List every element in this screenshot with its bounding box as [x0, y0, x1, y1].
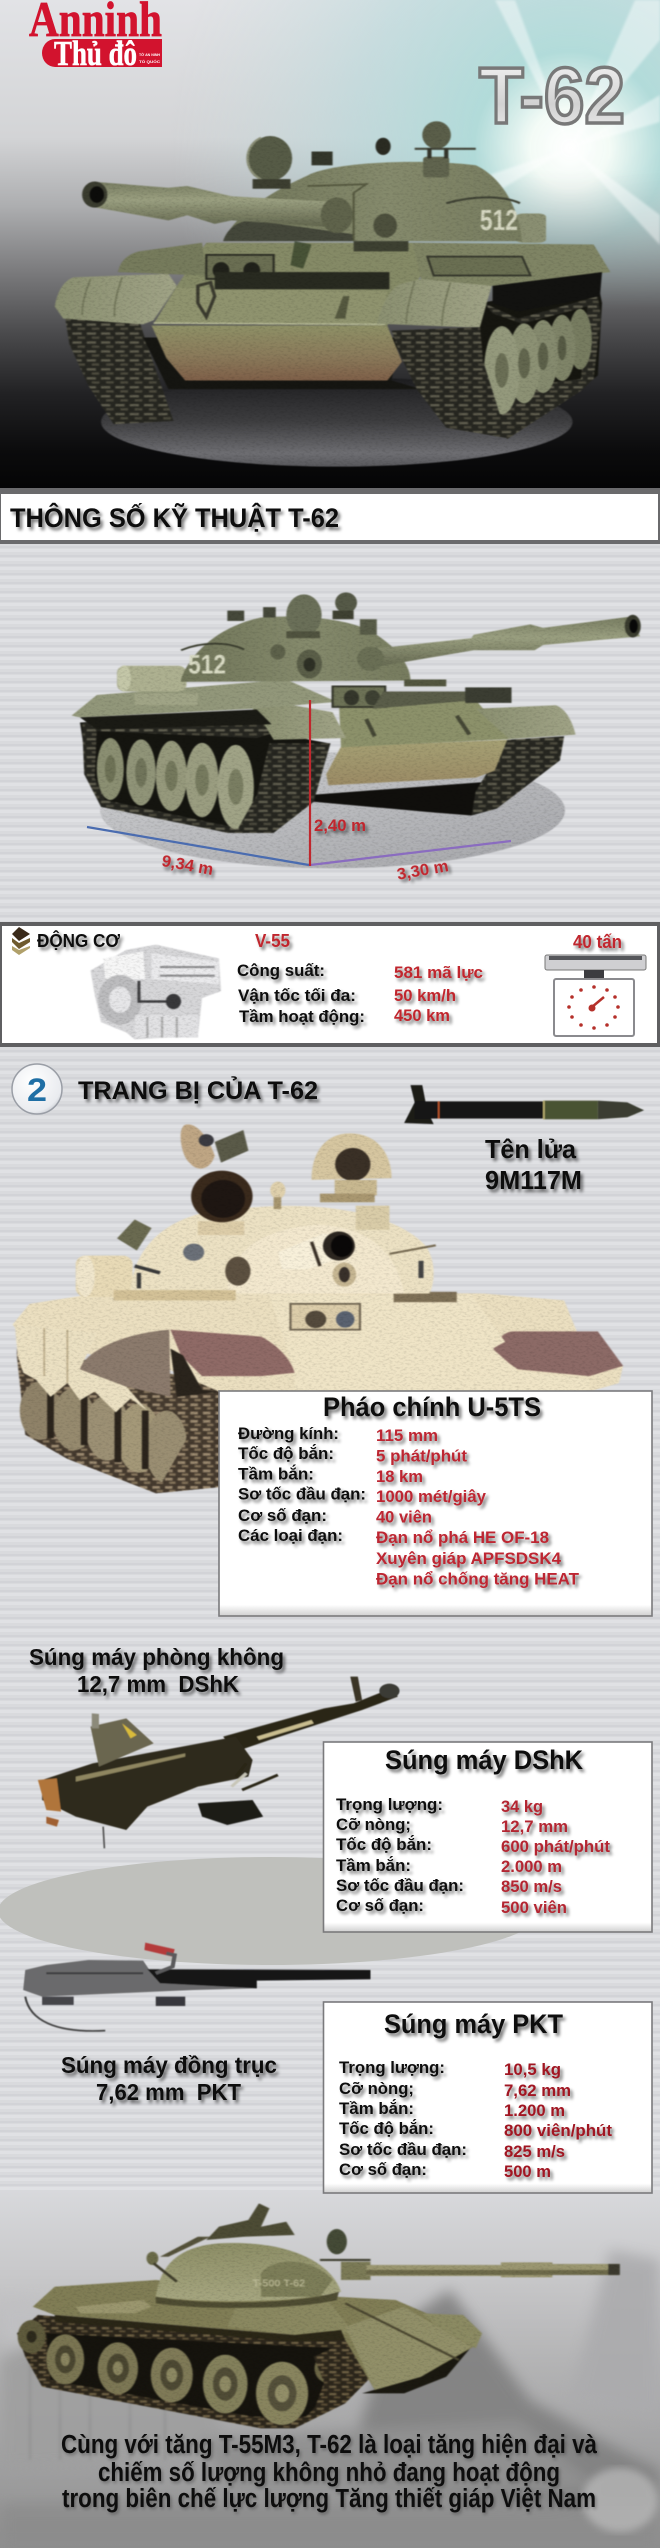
spec labels: Các loại đạn: [238, 1527, 343, 1545]
section heading bar: THONG SO KY THUAT [0, 488, 660, 544]
panel: DShK specs [324, 1742, 652, 1932]
icon: missile [404, 1085, 644, 1124]
spec labels: Tầm bắn: [336, 1856, 411, 1875]
illustration: olive T-62 tank side view [17, 2203, 620, 2428]
spec labels: Đường kính: [238, 1425, 339, 1443]
heading: engine: ĐỘNG CƠ [37, 930, 121, 951]
spec labels [336, 1796, 464, 1915]
illustration: DShK machine gun [38, 1677, 400, 1848]
label: anti-aircraft machine gun: Súng máy phòng không [29, 1644, 284, 1670]
weight value: 40 tấn [573, 932, 622, 952]
tank number: 512 [188, 650, 226, 680]
label: anti-aircraft machine gun [29, 1644, 284, 1697]
spec values: 10,5 kg [504, 2061, 561, 2079]
illustration: desert T-62 tank [13, 1124, 623, 1493]
spec values: 12,7 mm [501, 1818, 568, 1836]
footer background photo [0, 2190, 660, 2548]
panel: main gun U-5TS [219, 1391, 652, 1616]
spec labels: Cơ số đạn: [238, 1507, 327, 1525]
spec labels: Tốc độ bắn: [336, 1835, 432, 1854]
panel title: Súng máy DShK [385, 1745, 583, 1775]
spec values: 600 phát/phút [501, 1838, 611, 1856]
icon: engine [91, 945, 221, 1039]
spec labels: Cơ số đạn: [339, 2161, 427, 2179]
section badge: number 2: 2 [27, 1072, 47, 1108]
spec values: 800 viên/phút [504, 2122, 613, 2140]
spec labels: Sơ tốc đầu đạn: [339, 2141, 467, 2159]
spec: range [239, 1006, 450, 1026]
spec: power: Công suất: [237, 961, 325, 980]
label: coaxial machine gun: 7,62 mm PKT [96, 2079, 242, 2105]
panel: hero header with T-62 tank [0, 0, 660, 491]
section heading bar: THONG SO KY THUAT: THÔNG SỐ KỸ THUẬT T-62 [10, 501, 339, 533]
spec values: 500 m [504, 2163, 551, 2181]
spec labels: Cỡ nòng; [336, 1816, 411, 1834]
dimension line: width 3,30 m [310, 841, 511, 884]
spec values: 18 km [376, 1468, 423, 1486]
label: missile name [485, 1134, 582, 1195]
spec labels: Tốc độ bắn: [238, 1444, 334, 1463]
spec values: 825 m/s [504, 2143, 565, 2161]
label: coaxial machine gun [61, 2052, 277, 2105]
logo: An ninh Thu do [29, 0, 162, 73]
heading: equipment: TRANG BỊ CỦA T-62 [78, 1075, 318, 1105]
label: anti-aircraft machine gun: 12,7 mm DShK [77, 1671, 239, 1697]
spec labels [238, 1425, 366, 1545]
spec labels: Trọng lượng: [336, 1796, 443, 1814]
icon: layers [12, 927, 30, 955]
closing statement text [61, 2431, 598, 2513]
logo: An ninh Thu do: TỜ AN NINH [139, 52, 160, 57]
spec values: 7,62 mm [504, 2082, 571, 2100]
tank number: T-500 T-62 [253, 2279, 305, 2289]
spec: power: 581 mã lực [394, 963, 483, 982]
panel title: Súng máy PKT [384, 2009, 563, 2039]
spec values: Đạn nổ phá HE OF-18 [376, 1529, 549, 1547]
spec: max speed: 50 km/h [394, 986, 456, 1005]
label: coaxial machine gun: Súng máy đồng trục [61, 2052, 277, 2078]
illustration: T-62 with dimensions [72, 592, 641, 884]
closing statement text: chiếm số lượng không nhỏ đang hoạt động [98, 2459, 560, 2487]
spec labels: Sơ tốc đầu đạn: [238, 1486, 366, 1504]
spec values: 850 m/s [501, 1878, 562, 1896]
spec: max speed: Vận tốc tối đa: [238, 986, 356, 1005]
label: missile name: 9M117M [485, 1165, 582, 1195]
panel: PKT specs [324, 2002, 652, 2193]
icon: weighing scale [545, 955, 646, 1036]
shadow ellipse [0, 1857, 542, 1965]
spec: range: Tầm hoạt động: [239, 1007, 365, 1026]
tank number: 512 [480, 204, 518, 236]
spec values: 1.200 m [504, 2102, 565, 2120]
panel title: Pháo chính U-5TS [323, 1392, 541, 1422]
spec values: 34 kg [501, 1798, 543, 1816]
spec: power [237, 961, 483, 982]
illustration: green T-62 tank front view [55, 121, 610, 467]
logo: An ninh Thu do: Thủ đô [54, 34, 137, 73]
spec values: 500 viên [501, 1899, 567, 1917]
label: missile name: Tên lửa [485, 1134, 577, 1164]
spec labels: Tầm bắn: [339, 2099, 414, 2118]
spec: range: 450 km [394, 1006, 450, 1025]
spec: max speed [238, 986, 456, 1005]
spec values [501, 1798, 611, 1917]
spec values [376, 1427, 579, 1588]
title: T-62: T-62 [479, 51, 625, 140]
spec labels: Cỡ nòng; [339, 2080, 414, 2098]
spec values: 5 phát/phút [376, 1448, 468, 1466]
dimension line: width 3,30 m: 3,30 m [396, 857, 450, 884]
closing statement text: trong biên chế lực lượng Tăng thiết giáp Việt Nam [62, 2485, 596, 2513]
spec labels: Trọng lượng: [339, 2059, 445, 2077]
spec values: 40 viên [376, 1508, 432, 1526]
spec values: Xuyên giáp APFSDSK4 [376, 1550, 562, 1568]
logo: An ninh Thu do: TỔ QUỐC [139, 59, 160, 64]
dimension line: height 2,40 m: 2,40 m [314, 817, 366, 835]
spec labels: Sơ tốc đầu đạn: [336, 1877, 464, 1895]
tank side-front view [72, 592, 641, 868]
engine model: V-55 [255, 931, 290, 951]
spec values [504, 2061, 613, 2181]
illustration: PKT machine gun [23, 1943, 370, 2031]
dimension line: length 9,34 m: 9,34 m [160, 852, 215, 879]
closing statement text: Cùng với tăng T-55M3, T-62 là loại tăng hiện đại và [61, 2431, 598, 2459]
spec labels: Tầm bắn: [238, 1464, 314, 1484]
spec labels [339, 2059, 467, 2179]
spec values: 1000 mét/giây [376, 1488, 487, 1506]
spec values: 2.000 m [501, 1858, 562, 1876]
dimension line: length 9,34 m [87, 827, 309, 879]
section badge: number 2 [12, 1064, 62, 1114]
spec values: Đạn nổ chống tăng HEAT [376, 1570, 579, 1588]
spec values: 115 mm [376, 1427, 438, 1445]
spec labels: Tốc độ bắn: [339, 2119, 434, 2138]
panel: engine [0, 922, 660, 1047]
spec labels: Cơ số đạn: [336, 1897, 424, 1915]
